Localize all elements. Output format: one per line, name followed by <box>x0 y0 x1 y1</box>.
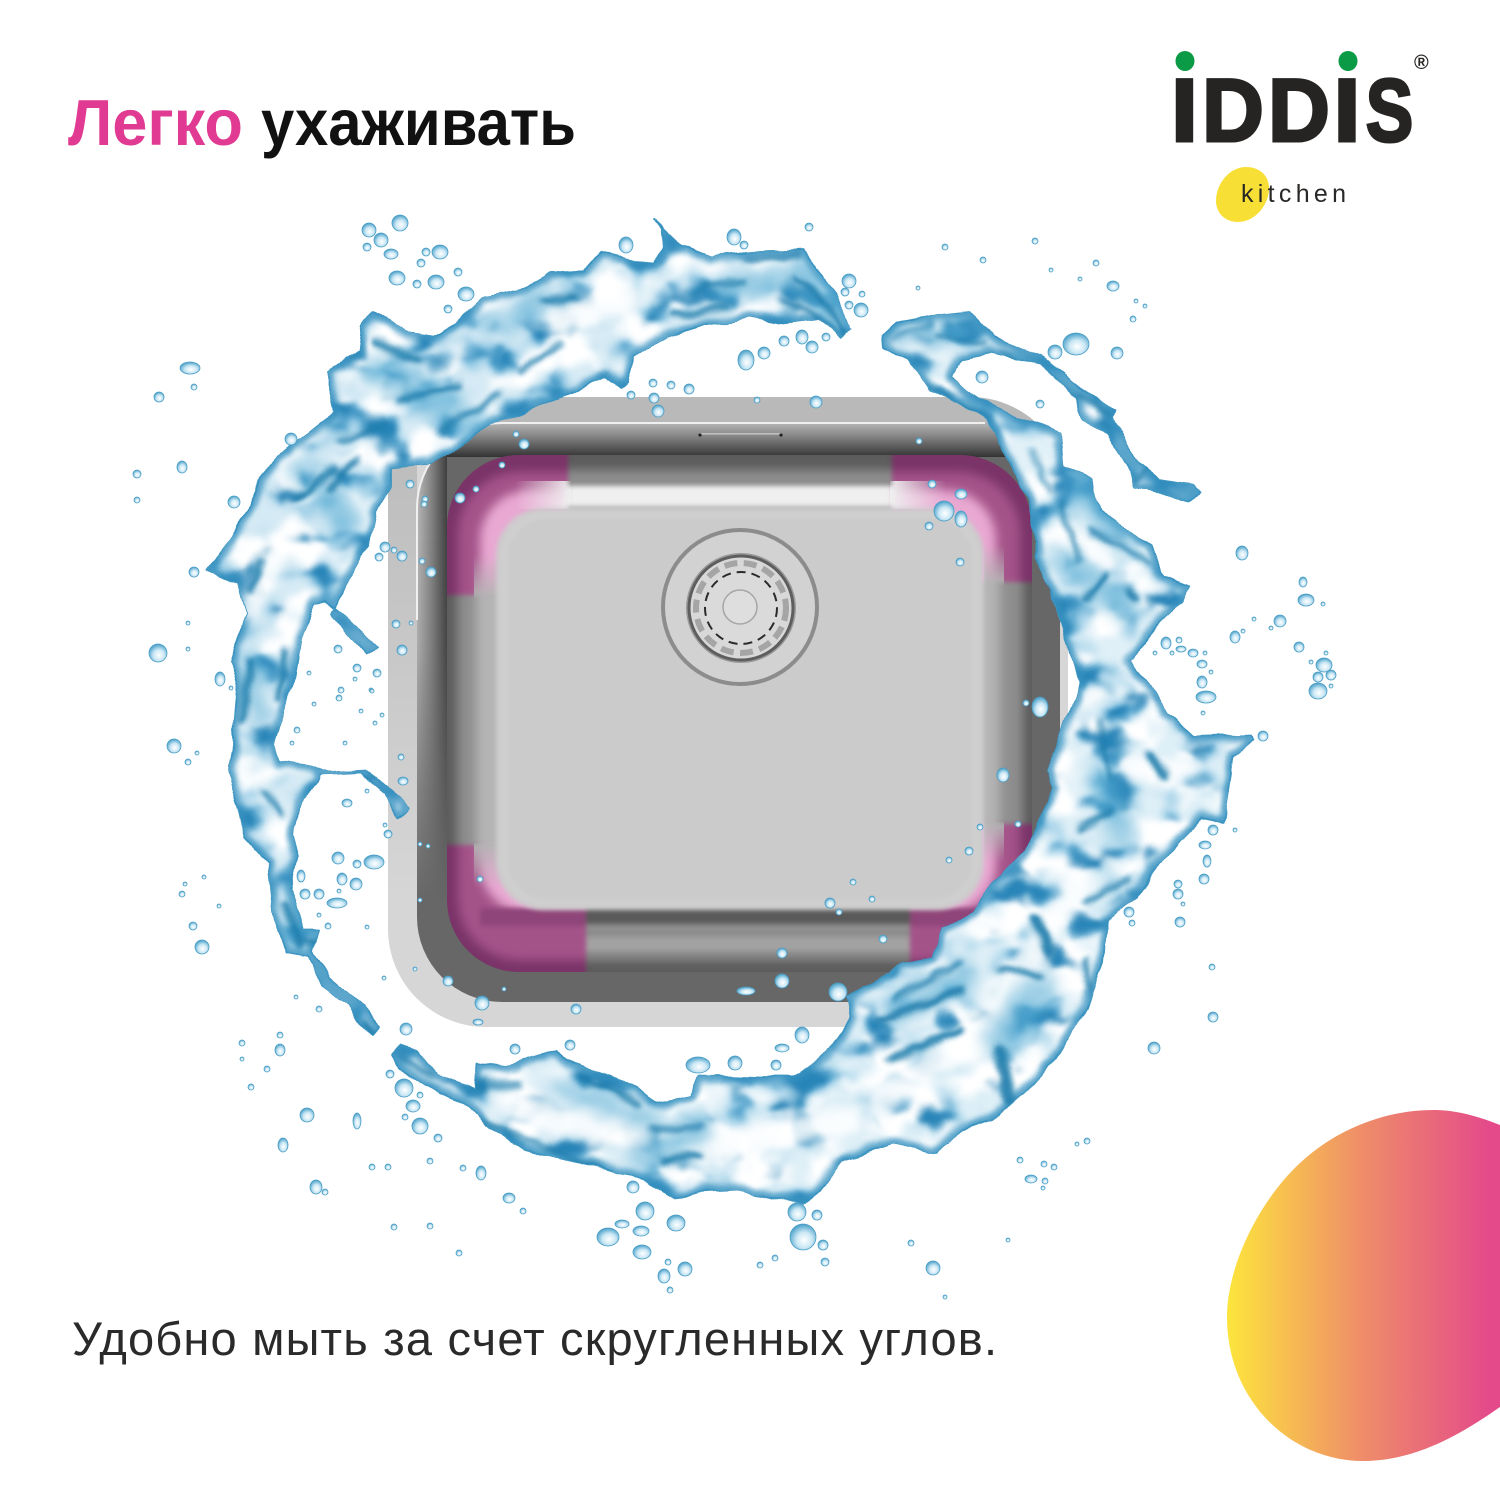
yellow spot <box>1216 167 1269 222</box>
title main word: ухаживать <box>261 86 576 159</box>
title accent word: Легко <box>68 86 243 159</box>
sink <box>380 390 1080 1027</box>
water splash ring <box>207 217 1253 1202</box>
registered mark: ® <box>1414 52 1429 74</box>
logo wordmark: D <box>1202 61 1264 160</box>
title <box>68 86 576 159</box>
water highlights and shadows <box>207 217 1253 1202</box>
sink floor <box>496 508 984 910</box>
sink outer plate <box>380 390 1080 1027</box>
overflow slot <box>698 433 783 437</box>
rounded corner highlights <box>447 455 1032 972</box>
kitchen label: kitchen <box>1241 180 1349 208</box>
logo wordmark: I <box>1171 60 1198 160</box>
pink fade-outs <box>474 481 1004 887</box>
sink wall <box>447 455 1032 972</box>
logo: IDDIS kitchen <box>1171 51 1429 222</box>
logo wordmark: I <box>1333 60 1361 160</box>
water texture <box>207 217 1253 1202</box>
water body <box>207 217 1253 1202</box>
caption: Удобно мыть за счет скругленных углов. <box>72 1312 997 1365</box>
logo wordmark: D <box>1268 61 1330 160</box>
gradient blob <box>1227 1110 1500 1461</box>
logo wordmark: S <box>1366 61 1413 161</box>
logo wordmark <box>1171 60 1413 161</box>
water droplets <box>133 215 1336 1299</box>
sink rim <box>417 423 1060 1002</box>
logo green dots <box>1176 51 1358 71</box>
drain <box>663 530 817 684</box>
